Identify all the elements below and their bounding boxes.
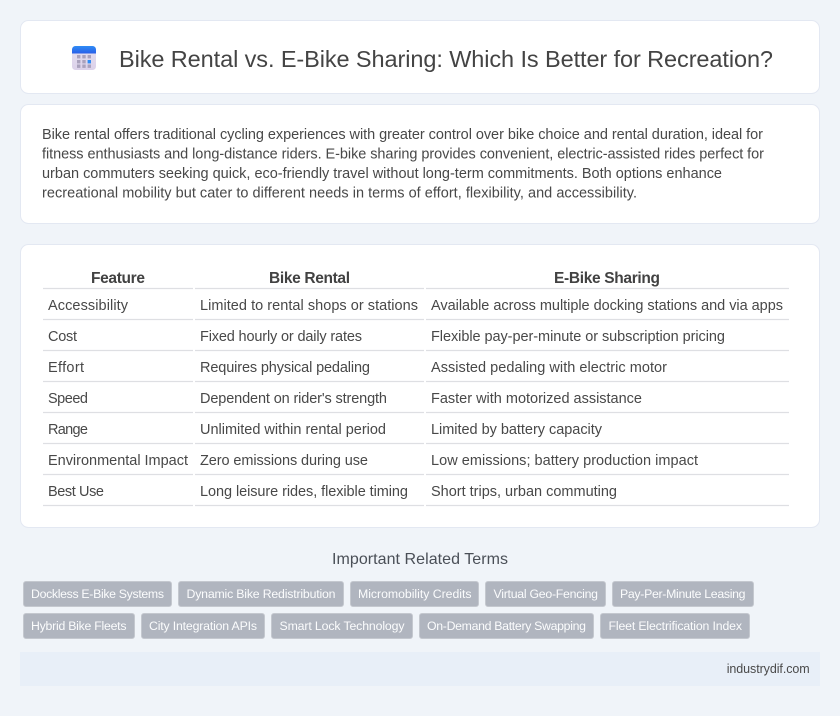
tag row 2: Smart Lock Technology	[280, 619, 405, 633]
row: cost	[48, 329, 725, 345]
footer bar	[20, 652, 820, 686]
row: effort: Requires physical pedaling	[200, 360, 370, 376]
row: best use: Long leisure rides, flexible timing	[200, 484, 408, 500]
panel: header	[20, 20, 820, 94]
row: environmental impact: Zero emissions during use	[200, 453, 368, 469]
tag row 1: Dynamic Bike Redistribution	[186, 587, 336, 601]
table header row: Bike Rental	[269, 270, 350, 287]
tag row 1: Dockless E-Bike Systems	[31, 587, 164, 601]
tag row 2: On-Demand Battery Swapping	[427, 619, 586, 633]
row: best use	[48, 484, 617, 500]
table header row	[91, 270, 660, 287]
intro paragraph: urban commuters seeking quick, eco-friendly travel without long-term commitments. Both options enhance	[42, 166, 722, 182]
row: accessibility: Available across multiple docking stations and via apps	[431, 298, 783, 314]
row: cost: Cost	[48, 329, 77, 345]
table header row: Feature	[91, 270, 145, 287]
row: effort: Assisted pedaling with electric motor	[431, 360, 667, 376]
intro paragraph: Bike rental offers traditional cycling experiences with greater control over bike choice and rental duration, ideal for	[42, 127, 763, 143]
title: Bike Rental vs. E-Bike Sharing: Which Is Better for Recreation?	[119, 46, 773, 72]
row: effort: Effort	[48, 360, 84, 376]
row: range	[48, 422, 603, 438]
row: environmental impact	[48, 453, 698, 469]
row: cost: Flexible pay-per-minute or subscription pricing	[431, 329, 725, 345]
tag row 1: Pay-Per-Minute Leasing	[620, 587, 746, 601]
panel: introduction	[20, 104, 820, 224]
section: related terms	[24, 551, 754, 638]
intro paragraph	[42, 127, 764, 202]
intro paragraph: recreational mobility but cater to different needs in terms of effort, flexibility, and accessibility.	[42, 186, 637, 202]
row: accessibility: Limited to rental shops or stations	[200, 298, 418, 314]
panel: comparison table	[20, 244, 820, 528]
row: speed	[48, 391, 642, 407]
row: best use: Best Use	[48, 484, 104, 500]
row: effort	[48, 360, 667, 376]
tag row 1: Micromobility Credits	[358, 587, 472, 601]
row: range: Unlimited within rental period	[200, 422, 386, 438]
table header row: E-Bike Sharing	[554, 270, 660, 287]
row: speed: Faster with motorized assistance	[431, 391, 642, 407]
tag row 1: Virtual Geo-Fencing	[494, 587, 598, 601]
row: cost: Fixed hourly or daily rates	[200, 329, 362, 345]
row: accessibility	[48, 298, 783, 314]
related terms heading: Important Related Terms	[332, 551, 508, 568]
intro paragraph: fitness enthusiasts and long-distance riders. E-bike sharing provides convenient, electric-assisted rides perfect for	[42, 146, 764, 162]
row: speed: Speed	[48, 391, 88, 407]
row: best use: Short trips, urban commuting	[431, 484, 617, 500]
tag row 2: City Integration APIs	[149, 619, 257, 633]
row: environmental impact: Environmental Impact	[48, 453, 188, 469]
tag row 2: Fleet Electrification Index	[608, 619, 743, 633]
row: speed: Dependent on rider's strength	[200, 391, 387, 407]
row: environmental impact: Low emissions; battery production impact	[431, 453, 698, 469]
row: range: Range	[48, 422, 88, 438]
tag row 2	[24, 614, 750, 638]
tag row 2: Hybrid Bike Fleets	[31, 619, 126, 633]
footer source text: industrydif.com	[727, 662, 810, 676]
row: accessibility: Accessibility	[48, 298, 129, 314]
row: range: Limited by battery capacity	[431, 422, 603, 438]
tag row 1	[24, 582, 754, 606]
icon: calendar	[72, 46, 96, 70]
